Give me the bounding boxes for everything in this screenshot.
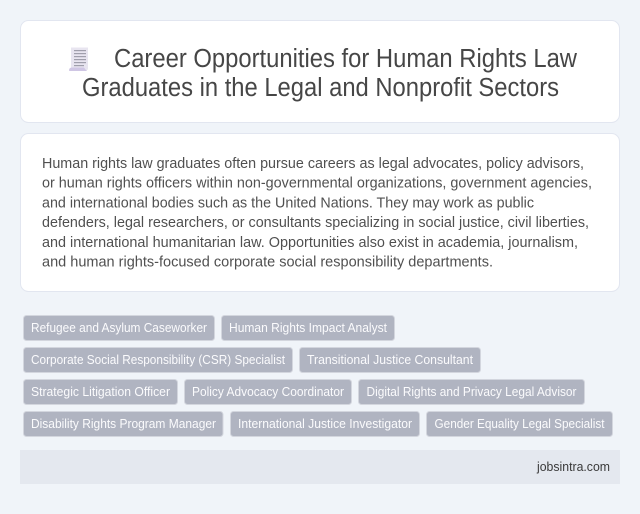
tag: Strategic Litigation Officer: Strategic Litigation Officer [31,384,171,399]
tag: Transitional Justice Consultant [300,348,480,372]
panel: career tags [24,316,612,436]
tag: Human Rights Impact Analyst [222,316,394,340]
tag: Gender Equality Legal Specialist [426,412,612,436]
text block: description: and human rights-focused corporate social responsibility departments. [42,254,493,270]
tag: Gender Equality Legal Specialist: Gender Equality Legal Specialist [434,416,605,431]
tag: Refugee and Asylum Caseworker: Refugee and Asylum Caseworker [31,320,208,335]
tag: Digital Rights and Privacy Legal Advisor [358,380,584,404]
tag: Policy Advocacy Coordinator: Policy Advocacy Coordinator [192,384,345,399]
footer text: source: jobsintra.com [536,459,610,474]
tag: Human Rights Impact Analyst: Human Rights Impact Analyst [229,320,387,335]
text block: description: and international bodies such as the United Nations. They may work as public [42,195,535,211]
tag: Strategic Litigation Officer [24,380,178,404]
panel: title card [20,20,620,122]
footer bar [20,450,620,484]
text block: description [42,156,592,270]
text block: description: defenders, legal researchers, or consultants specializing in social justice, civil liberties, [42,215,589,231]
text block: description: and international humanitarian law. Opportunities also exist in academia, journalism, [42,235,578,251]
heading: Career Opportunities for Human Rights Law [114,45,578,73]
tag: International Justice Investigator: International Justice Investigator [238,416,413,431]
tag: CSR Specialist [24,348,292,372]
tag: Disability Rights Program Manager: Disability Rights Program Manager [31,416,217,431]
heading: Graduates in the Legal and Nonprofit Sectors [82,74,559,102]
tag: Transitional Justice Consultant: Transitional Justice Consultant [307,352,473,367]
panel: description card [20,134,620,292]
tag: Policy Advocacy Coordinator [184,380,352,404]
tag: Disability Rights Program Manager [24,412,223,436]
heading [82,45,578,102]
tag: International Justice Investigator [230,412,420,436]
text block: description: or human rights officers within non-governmental organizations, government agencies, [42,176,592,192]
icon: legal scroll document [69,48,88,71]
tag: Digital Rights and Privacy Legal Advisor: Digital Rights and Privacy Legal Advisor [366,384,577,399]
tag: CSR Specialist: Corporate Social Responsibility (CSR) Specialist [31,352,285,367]
text block: description: Human rights law graduates often pursue careers as legal advocates, policy advisors, [42,156,584,172]
tag: Refugee and Asylum Caseworker [24,316,214,340]
